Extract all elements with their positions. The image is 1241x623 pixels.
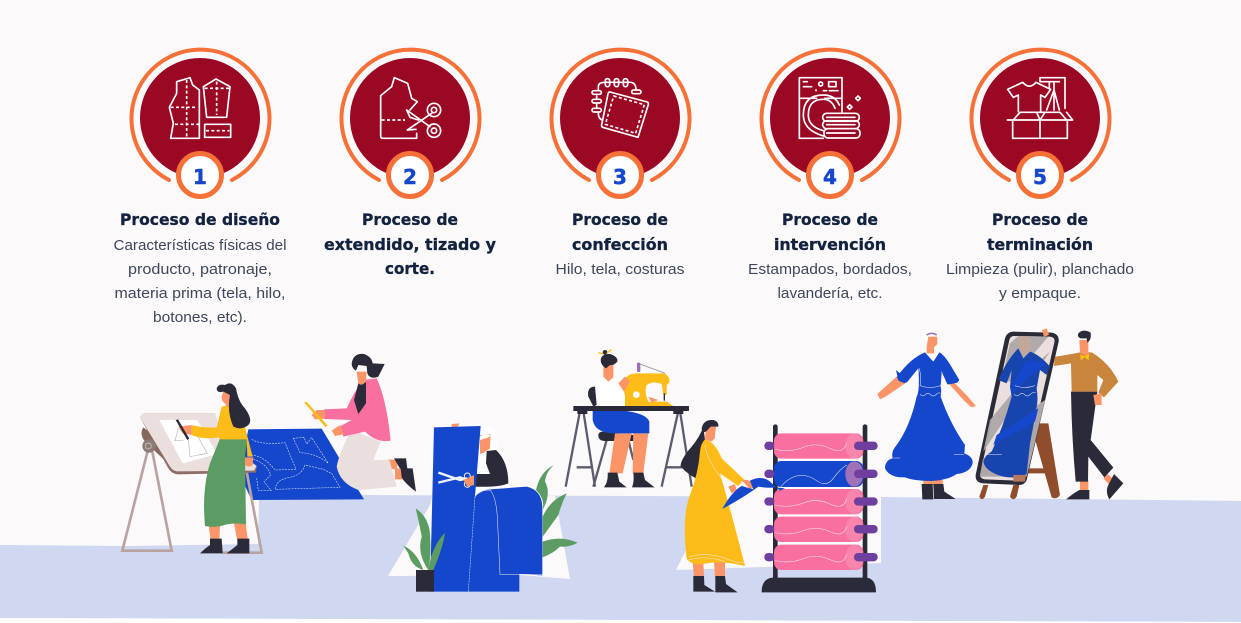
drafting table [122, 413, 262, 553]
heading 1: Proceso de diseño [120, 210, 280, 229]
heading 2 [324, 210, 497, 278]
icon: garment pattern pieces [169, 78, 231, 138]
step 3: sewing [552, 50, 690, 278]
icon: pattern and scissors [381, 78, 441, 138]
woman in yellow sweater [176, 383, 253, 553]
hanging blue fabric [430, 426, 542, 592]
scissors [438, 473, 474, 487]
backdrop wedge behind fabric rack [676, 496, 881, 570]
heading 5: Proceso de [992, 210, 1088, 229]
description 1 [114, 237, 286, 326]
badge 1 [132, 50, 270, 196]
left plant in pot [403, 508, 445, 592]
blue pattern sheet [239, 429, 364, 500]
badge 2 [341, 50, 479, 196]
fabric rolls [774, 433, 863, 570]
table [566, 387, 692, 487]
heading 5 [987, 210, 1093, 254]
description 4: Estampados, bordados, [748, 261, 912, 278]
floor [0, 495, 1241, 622]
badge 4 [762, 50, 900, 196]
heading 4: Proceso de [782, 210, 878, 229]
fabric pulled from roll [722, 478, 785, 509]
icon: clothes in a box [1007, 78, 1073, 138]
description 5: Limpieza (pulir), planchado [946, 261, 1134, 278]
step 5: final finishing [946, 50, 1134, 302]
description 5 [946, 261, 1134, 302]
step 1: design process [114, 50, 286, 326]
illustration: pattern makers [122, 354, 416, 553]
heading 4: intervención [774, 235, 886, 254]
illustration: seamstress at sewing machine [566, 349, 692, 487]
backdrop wedge behind plants [388, 496, 570, 579]
badge 2: 2 [403, 165, 417, 189]
right plant [536, 465, 578, 557]
woman in yellow dress [681, 420, 756, 592]
illustration: woman with fabric rack [681, 420, 878, 592]
standing mirror [976, 332, 1059, 485]
roll spindles [764, 442, 878, 561]
icon: thread and fabric patch [592, 79, 648, 137]
badge 3: 3 [613, 165, 627, 189]
description 1: materia prima (tela, hilo, [114, 285, 286, 302]
description 1: producto, patronaje, [128, 261, 272, 278]
man in mustard shirt [1042, 328, 1123, 499]
badge 5 [972, 50, 1110, 196]
badge 1: 1 [193, 165, 207, 189]
heading 2: Proceso de [362, 210, 458, 229]
description 5: y empaque. [999, 285, 1081, 302]
kneeling woman in pink jacket [304, 354, 416, 492]
description 4: lavandería, etc. [778, 285, 882, 302]
illustration: fabric cutter [403, 423, 578, 592]
illustration: dress fitting [877, 328, 1123, 499]
rack posts [762, 427, 876, 592]
description 1: botones, etc). [153, 309, 247, 326]
icon: washing machine and folded clothes [799, 78, 860, 138]
heading 3: confección [572, 235, 668, 254]
badge 3 [552, 50, 690, 196]
step 4: finishing interventions [748, 50, 912, 302]
description 4 [748, 261, 912, 302]
person with white hair [452, 423, 508, 497]
badge 4: 4 [823, 165, 837, 189]
woman in blue dress [877, 328, 976, 499]
heading 3: Proceso de [572, 210, 668, 229]
mirror stand [979, 423, 1060, 499]
step 2: spreading, marking and cutting [324, 50, 497, 278]
heading 3 [572, 210, 668, 254]
description 1: Características físicas del [114, 237, 286, 254]
heading 4 [774, 210, 886, 254]
badge 5: 5 [1033, 165, 1047, 189]
floor bottom margin [0, 618, 1241, 623]
seamstress [593, 349, 658, 487]
heading 5: terminación [987, 235, 1093, 254]
heading 2: corte. [385, 259, 435, 278]
sewing machine [624, 363, 673, 406]
description 3: Hilo, tela, costuras [556, 261, 684, 278]
heading 2: extendido, tizado y [324, 235, 497, 254]
